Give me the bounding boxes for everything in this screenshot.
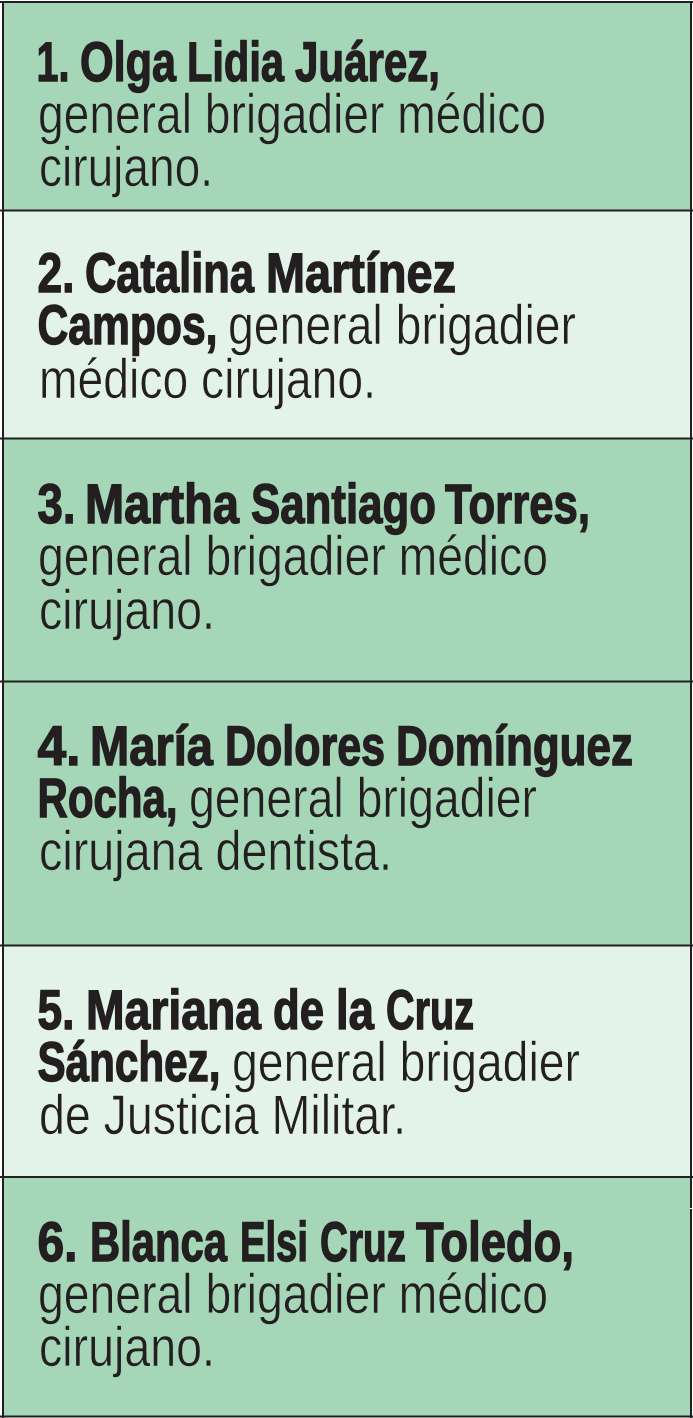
row 5: Mariana de la Cruz Sánchez: la (336, 978, 375, 1041)
row 2: Catalina Martínez Campos: médico cirujano. (39, 347, 376, 410)
row 3: Martha Santiago Torres: general brigadier médico (38, 524, 548, 587)
row 1: Olga Lidia Juárez: 1. (36, 30, 70, 93)
row 5: Mariana de la Cruz Sánchez: de Justicia Militar. (39, 1083, 406, 1146)
row 6: Blanca Elsi Cruz Toledo: cirujano. (39, 1315, 215, 1378)
row 2: Catalina Martínez Campos: Martínez (266, 241, 456, 304)
row 4: María Dolores Domínguez Rocha: 4. (38, 714, 80, 777)
row 1: Olga Lidia Juárez: cirujano. (39, 135, 213, 198)
row 1: Olga Lidia Juárez: Lidia (187, 30, 285, 93)
row 5: Mariana de la Cruz Sánchez: 5. (38, 978, 74, 1041)
row 3: Martha Santiago Torres: Torres, (445, 472, 590, 535)
row 3: Martha Santiago Torres: cirujano. (39, 578, 215, 641)
row 4: María Dolores Domínguez Rocha: Dolores (225, 714, 385, 777)
row 5: Mariana de la Cruz Sánchez (3, 945, 691, 1177)
row 6: Blanca Elsi Cruz Toledo: Elsi (240, 1210, 308, 1273)
row 6: Blanca Elsi Cruz Toledo: general brigadier médico (38, 1262, 548, 1325)
row 2: Catalina Martínez Campos: Catalina (85, 241, 255, 304)
row 4: María Dolores Domínguez Rocha (3, 681, 691, 945)
row 4: María Dolores Domínguez Rocha: Domínguez (396, 714, 633, 777)
row 2: Catalina Martínez Campos: general brigadier (228, 293, 576, 356)
row 4: María Dolores Domínguez Rocha: María (90, 714, 214, 777)
row 1: Olga Lidia Juárez: Olga (80, 30, 177, 93)
row 1: Olga Lidia Juárez: general brigadier médico (38, 82, 546, 145)
row 2: Catalina Martínez Campos: Campos, (38, 293, 218, 356)
row 4: María Dolores Domínguez Rocha: Rocha, (38, 766, 178, 829)
row 3: Martha Santiago Torres (3, 438, 691, 681)
row 2: Catalina Martínez Campos: 2. (38, 241, 74, 304)
row 5: Mariana de la Cruz Sánchez: Sánchez, (38, 1030, 220, 1093)
row 6: Blanca Elsi Cruz Toledo: Blanca (90, 1210, 228, 1273)
row 1: Olga Lidia Juárez: Juárez, (295, 30, 440, 93)
row 4: María Dolores Domínguez Rocha: cirujana dentista. (39, 819, 392, 882)
row 5: Mariana de la Cruz Sánchez: de (273, 978, 324, 1041)
row 3: Martha Santiago Torres: 3. (38, 472, 76, 535)
row 5: Mariana de la Cruz Sánchez: Mariana (86, 978, 262, 1041)
row 6: Blanca Elsi Cruz Toledo: Toledo, (416, 1210, 574, 1273)
row 3: Martha Santiago Torres: Santiago (251, 472, 436, 535)
row 5: Mariana de la Cruz Sánchez: Cruz (386, 978, 474, 1041)
row 2: Catalina Martínez Campos (3, 210, 691, 438)
row 6: Blanca Elsi Cruz Toledo: 6. (38, 1210, 78, 1273)
row 5: Mariana de la Cruz Sánchez: general brigadier (232, 1030, 580, 1093)
row 4: María Dolores Domínguez Rocha: general brigadier (189, 766, 537, 829)
row 3: Martha Santiago Torres: Martha (85, 472, 240, 535)
row 6: Blanca Elsi Cruz Toledo (3, 1177, 691, 1416)
row 1: Olga Lidia Juárez (3, 3, 691, 210)
row 6: Blanca Elsi Cruz Toledo: Cruz (320, 1210, 406, 1273)
